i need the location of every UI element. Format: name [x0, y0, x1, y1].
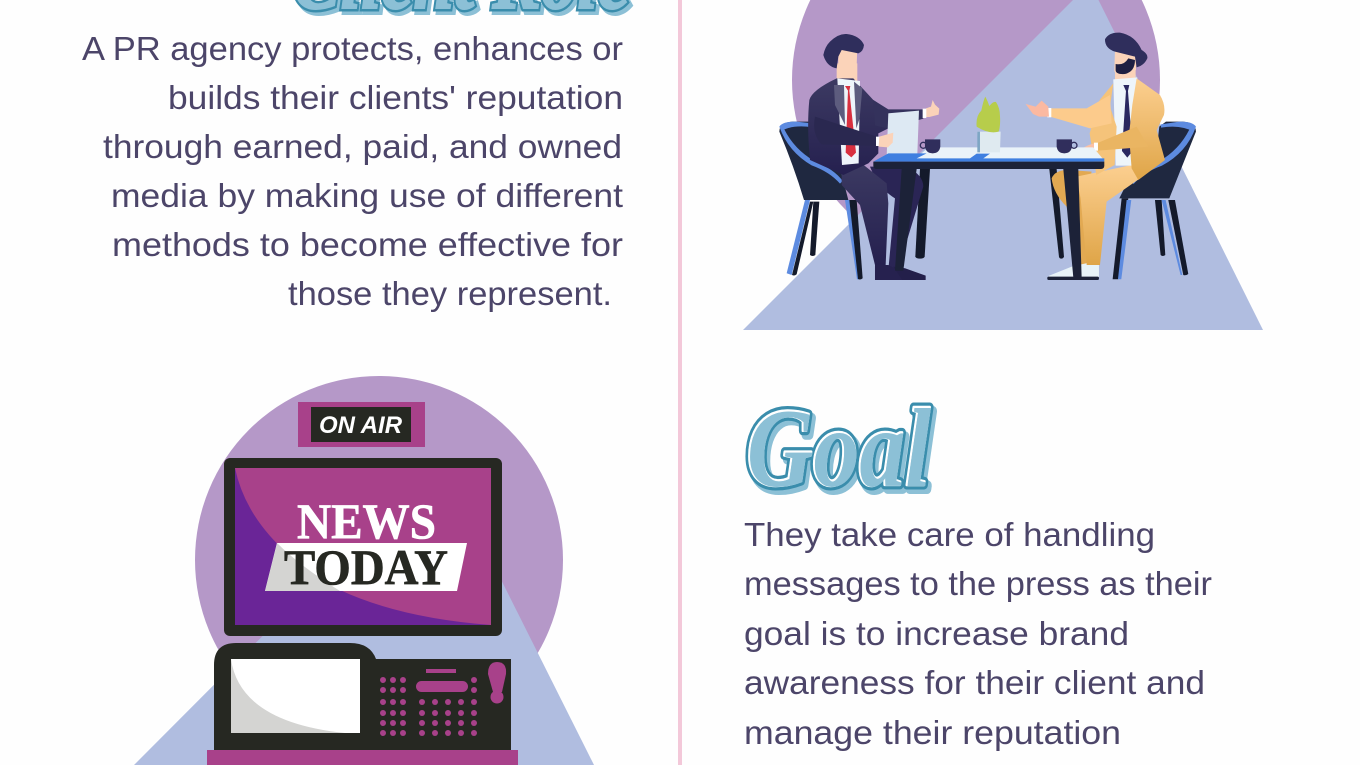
television: TODAY [284, 539, 448, 595]
right man [1026, 33, 1165, 277]
table [873, 147, 1104, 280]
text block: what a PR agency does: through earned, paid, and owned [103, 128, 622, 165]
arm [1050, 95, 1112, 128]
text block: goal description: manage their reputation [744, 714, 1121, 751]
text block: what a PR agency does: builds their clients' reputation [168, 79, 623, 116]
control console [207, 643, 518, 765]
text block: goal description: messages to the press as their [744, 565, 1212, 602]
text block: goal description: awareness for their client and [744, 664, 1205, 701]
rear leg [1052, 170, 1092, 267]
illustration: business meeting [743, 0, 1263, 330]
face [1114, 50, 1137, 75]
on air sign [298, 402, 425, 447]
text block: what a PR agency does: those they represent. [288, 275, 612, 312]
lapels [834, 82, 862, 128]
text block: goal description: goal is to increase brand [744, 615, 1129, 652]
text block: goal description [744, 516, 1212, 751]
document [887, 111, 919, 157]
shoes [875, 265, 912, 280]
tie [845, 86, 856, 157]
cups [920, 139, 1077, 153]
television [224, 458, 502, 636]
text block: what a PR agency does: A PR agency protects, enhances or [82, 30, 623, 67]
back table legs [915, 169, 1064, 259]
face [838, 44, 857, 74]
sneakers [1048, 263, 1087, 277]
jacket [1090, 83, 1117, 175]
beard [1116, 58, 1135, 74]
sleeve [814, 117, 877, 146]
background circle [195, 376, 563, 744]
raised hand [926, 100, 939, 117]
background triangle [134, 458, 594, 765]
potted plant [976, 97, 1001, 152]
neck [1115, 60, 1136, 83]
text block: what a PR agency does [82, 30, 623, 312]
on air sign: ON AIR [319, 412, 403, 439]
text block: what a PR agency does: methods to become effective for [112, 226, 623, 263]
hair [1105, 33, 1147, 67]
background triangle [743, 0, 1263, 330]
left man [808, 34, 939, 280]
heading: goal: Goal [749, 390, 933, 514]
shirt [1113, 77, 1137, 166]
hair [823, 34, 864, 68]
illustration: news broadcast [134, 376, 594, 765]
neck [837, 63, 857, 83]
rear leg [870, 167, 923, 270]
background circle [792, 0, 1160, 264]
heading: goal: Goal [746, 386, 930, 510]
right chair [1113, 122, 1196, 279]
tie [1122, 85, 1133, 158]
heading: goal: Goal [747, 387, 931, 511]
text block: goal description: They take care of handling [744, 516, 1155, 553]
television: NEWS [297, 493, 436, 549]
front leg [1077, 165, 1140, 265]
hands [1078, 143, 1094, 154]
text block: what a PR agency does: media by making use of different [111, 177, 623, 214]
shirt [837, 78, 860, 165]
heading: goal: Goal [746, 386, 930, 510]
front leg [842, 163, 888, 265]
left chair [779, 122, 863, 280]
jacket [808, 78, 888, 175]
